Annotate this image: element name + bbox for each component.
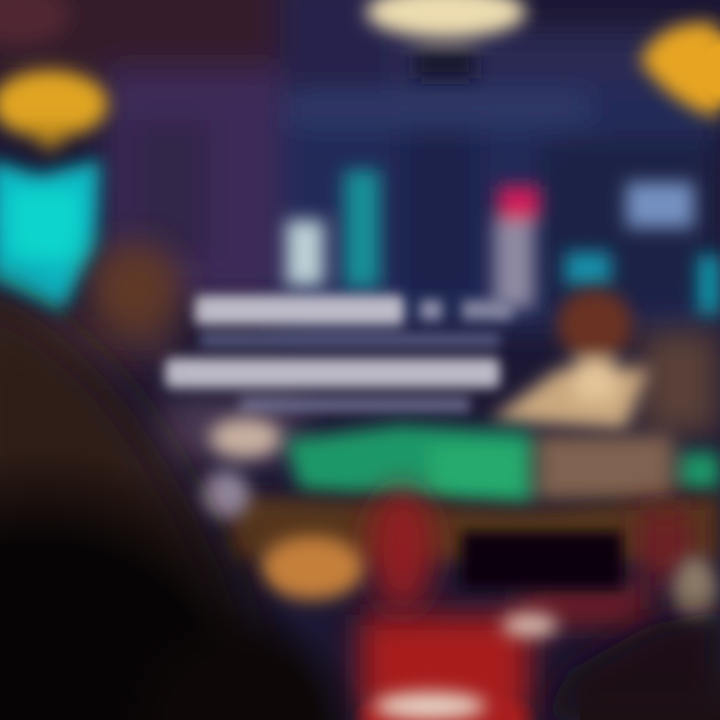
person: foreground shadow near carpet (115, 605, 365, 720)
panel: cyan screen at left (0, 160, 100, 312)
table edge: brown rail (230, 495, 720, 560)
lower area: red carpet and chips (350, 510, 690, 720)
chip stack: dark red (368, 488, 436, 612)
heading: blurred white title lines (165, 295, 512, 412)
bar chart: blurred glowing bars (286, 170, 720, 315)
lamp: top left yellow (0, 0, 108, 152)
person: foreground dark shadow (0, 440, 320, 720)
person: head in mid-left background (89, 242, 181, 338)
person: dealer at right (490, 289, 720, 435)
lamp: top centre cream (366, 0, 526, 78)
poker table: green felt (285, 425, 720, 505)
person: foreground hair silhouette (0, 280, 260, 720)
background: purple and blue wall (0, 0, 720, 460)
highlights: white and orange glows (201, 418, 717, 720)
lamp: top right yellow (640, 23, 720, 118)
person: foreground figure at bottom right (540, 610, 720, 720)
panel: black rectangle on table (462, 532, 622, 588)
